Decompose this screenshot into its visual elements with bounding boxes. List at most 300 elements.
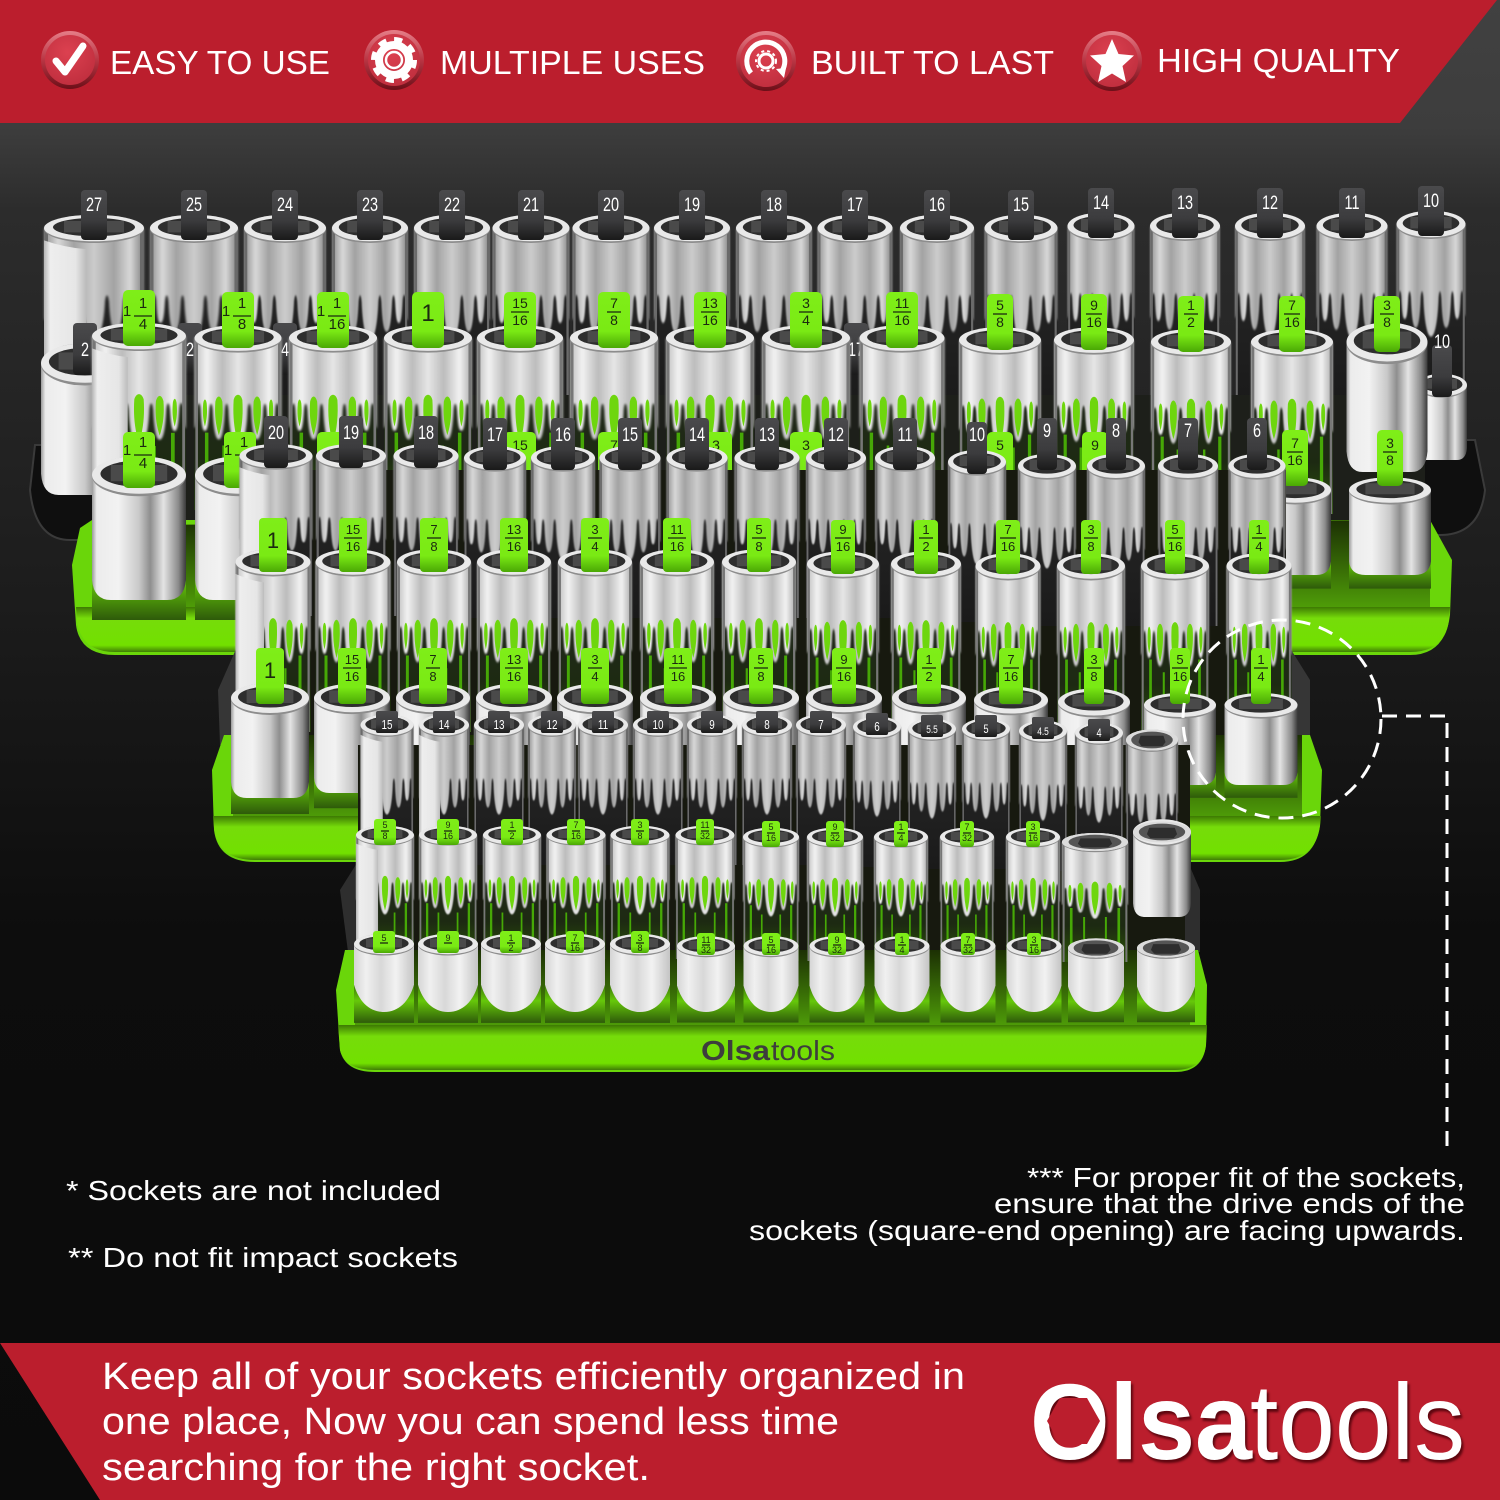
socket 5/16: 16 bbox=[1168, 539, 1182, 554]
socket 1 1/4 front: 4 bbox=[139, 455, 147, 472]
footer message: one place, Now you can spend less time bbox=[102, 1401, 839, 1443]
socket 5 bbox=[962, 715, 1010, 869]
rack: middle black base bbox=[218, 640, 1310, 745]
socket 9 bbox=[1018, 418, 1076, 626]
socket 7/8 front bbox=[396, 648, 470, 808]
logo on tray: Olsa bbox=[701, 1035, 770, 1066]
socket 3/4 front: 4 bbox=[591, 669, 599, 684]
socket 1/4: 1 bbox=[898, 822, 904, 832]
socket 5.5: 5.5 bbox=[926, 724, 938, 736]
socket 1 1/8: 8 bbox=[238, 316, 246, 333]
peg 7/8 front: 7 bbox=[610, 437, 618, 453]
socket 13/16: 13 bbox=[702, 295, 718, 311]
socket 7/16 bbox=[976, 520, 1040, 736]
socket 20: 20 bbox=[268, 422, 284, 444]
socket 1/4: 4 bbox=[1255, 539, 1263, 554]
socket 25 bbox=[150, 190, 238, 404]
socket 14 bbox=[1068, 188, 1134, 402]
peg 15/16 front bbox=[504, 432, 536, 488]
socket 11/16: 11 bbox=[670, 522, 684, 537]
socket 11/32: 11 bbox=[701, 935, 711, 945]
socket 7/16 bbox=[546, 819, 606, 959]
socket 11/32 bbox=[676, 819, 734, 959]
socket 3/8 front bbox=[1349, 430, 1431, 589]
socket row: middle metric bbox=[240, 416, 1286, 626]
socket 15/16 front: 15 bbox=[345, 652, 359, 667]
socket 7/8: 7 bbox=[610, 295, 618, 311]
socket row: front inch bbox=[356, 819, 1191, 962]
socket 18 bbox=[736, 190, 812, 404]
socket 1 1/4: 1 bbox=[123, 303, 131, 320]
socket 1 bbox=[236, 518, 310, 732]
socket 6: 6 bbox=[1253, 420, 1261, 442]
socket 1/4: 4 bbox=[899, 945, 905, 955]
socket 14: 14 bbox=[689, 424, 705, 446]
socket 11/16 front bbox=[640, 648, 716, 808]
socket 1 1/4 bbox=[92, 290, 186, 512]
note: proper fit: ensure that the drive ends of the bbox=[994, 1188, 1465, 1219]
socket 23: 23 bbox=[362, 194, 378, 216]
socket 8 bbox=[1087, 418, 1145, 626]
socket 15: 15 bbox=[1013, 194, 1029, 216]
socket 3/8 front bbox=[1058, 648, 1130, 806]
socket 1 front bbox=[231, 648, 309, 814]
socket 11/16 front: 11 bbox=[671, 652, 685, 667]
socket 1/2: 1 bbox=[922, 522, 930, 537]
peg 9/16 front bbox=[1082, 432, 1108, 488]
socket 7/32 bbox=[940, 821, 994, 961]
socket 9/16: 16 bbox=[443, 831, 453, 841]
socket 3/16: 16 bbox=[1028, 833, 1038, 843]
socket row: middle inch bbox=[236, 518, 1292, 736]
socket 12: 12 bbox=[547, 719, 557, 732]
socket 3/8 bbox=[610, 819, 670, 959]
socket 20 bbox=[572, 190, 650, 404]
socket 12 bbox=[528, 711, 576, 865]
socket 10: 10 bbox=[1423, 190, 1439, 212]
socket 11 bbox=[875, 418, 935, 618]
socket 15/16 front bbox=[314, 648, 390, 808]
socket 1/2 bbox=[483, 819, 541, 959]
socket 3/4: 4 bbox=[802, 312, 810, 328]
socket 13/16: 13 bbox=[507, 522, 521, 537]
socket 7/32: 7 bbox=[964, 822, 970, 832]
socket 1/4 front bbox=[1224, 648, 1298, 798]
socket 15/16: 15 bbox=[512, 295, 528, 311]
socket 5/8: 8 bbox=[382, 831, 388, 841]
socket blank bbox=[1137, 938, 1195, 1022]
socket 1/4 bbox=[874, 933, 930, 1023]
socket 9/16: 16 bbox=[1086, 314, 1102, 330]
socket 1 1/4: 1 bbox=[139, 295, 147, 312]
socket 4.5 bbox=[1019, 717, 1067, 871]
socket short left: 2 bbox=[81, 339, 89, 361]
socket 24: 24 bbox=[277, 194, 293, 216]
socket 1 1/8 front: 1 bbox=[224, 442, 232, 459]
socket 13: 13 bbox=[494, 719, 504, 732]
tray: front green bbox=[336, 950, 1207, 1072]
socket 5/8: 5 bbox=[382, 820, 388, 830]
socket 6 bbox=[853, 713, 901, 867]
socket 7/16: 16 bbox=[1284, 314, 1300, 330]
logo: Olsatools bbox=[1030, 1361, 1465, 1482]
socket 9/16 bbox=[807, 520, 879, 734]
socket 7/16 bbox=[545, 931, 605, 1023]
socket 22 bbox=[414, 190, 490, 404]
peg 15/16 front: 15 bbox=[512, 437, 528, 453]
socket 3/16: 3 bbox=[1031, 935, 1037, 945]
socket 9/32 bbox=[810, 933, 864, 1023]
socket 9/16 bbox=[419, 819, 477, 959]
socket 12 bbox=[806, 418, 866, 618]
socket 1/4 bbox=[874, 821, 928, 961]
peg 5/8 front bbox=[987, 432, 1013, 488]
socket 1 1/16: 1 bbox=[333, 295, 341, 312]
socket 3/8 front: 3 bbox=[1386, 435, 1394, 451]
socket 3/4 front: 3 bbox=[591, 652, 599, 667]
socket 9/32 bbox=[807, 821, 863, 961]
socket 11/16 bbox=[860, 292, 944, 510]
socket 11/32: 11 bbox=[700, 820, 710, 830]
socket 1/2: 1 bbox=[509, 820, 515, 830]
socket 8 bbox=[742, 711, 792, 865]
socket 5/8: 5 bbox=[996, 297, 1004, 313]
logo: Olsatools: Olsa bbox=[1030, 1361, 1253, 1482]
label: easy to use: EASY TO USE bbox=[110, 44, 330, 81]
socket 13/16 front: 13 bbox=[507, 652, 521, 667]
icon: check badge bbox=[41, 31, 99, 89]
socket 3/8 bbox=[1346, 296, 1428, 472]
label: built to last: BUILT TO LAST bbox=[811, 44, 1054, 81]
socket 3/8: 8 bbox=[637, 831, 643, 841]
socket 15/16: 15 bbox=[346, 522, 360, 537]
peg 24 bbox=[273, 323, 297, 375]
socket short 10 bbox=[1417, 331, 1467, 460]
socket 13/16 bbox=[666, 292, 754, 510]
socket 14: 14 bbox=[439, 719, 450, 732]
socket 3/16: 16 bbox=[1029, 945, 1039, 955]
socket 1/2 bbox=[891, 520, 961, 734]
socket 1/2 front: 2 bbox=[925, 669, 933, 684]
socket 5/16 front: 5 bbox=[1176, 652, 1184, 667]
icon: star badge bbox=[1082, 31, 1142, 91]
socket 7: 7 bbox=[818, 719, 824, 732]
socket 16: 16 bbox=[555, 424, 571, 446]
socket 17: 17 bbox=[847, 194, 863, 216]
footer message bbox=[102, 1356, 965, 1489]
socket 23 bbox=[332, 190, 408, 404]
socket 7/16: 16 bbox=[1001, 539, 1015, 554]
socket 13 bbox=[1150, 188, 1220, 402]
socket 5/8: 5 bbox=[381, 933, 387, 943]
socket 5/16: 5 bbox=[768, 935, 774, 945]
note: proper fit: sockets (square-end opening) are facing upwards. bbox=[749, 1215, 1465, 1246]
socket 7/16 front: 7 bbox=[1007, 652, 1015, 667]
socket 1 1/8: 1 bbox=[222, 303, 230, 320]
socket 1/2 front: 1 bbox=[925, 652, 933, 667]
socket 11/32 bbox=[677, 933, 735, 1023]
note: proper fit bbox=[749, 1162, 1465, 1246]
socket 1/2 bbox=[481, 931, 541, 1023]
socket 1: 1 bbox=[421, 300, 435, 327]
front dark cavity bbox=[358, 745, 1190, 960]
socket 1 1/4 front: 1 bbox=[123, 442, 131, 459]
socket 9/16: 9 bbox=[445, 820, 451, 830]
socket 9/16: 9 bbox=[445, 933, 451, 943]
footer message: Keep all of your sockets efficiently organized in bbox=[102, 1356, 965, 1398]
socket 1 front: 1 bbox=[264, 658, 276, 683]
back dark cavity bbox=[95, 395, 1425, 565]
socket row: back inch bbox=[92, 290, 1428, 514]
socket 11/16: 16 bbox=[670, 539, 684, 554]
socket 7/32: 32 bbox=[962, 833, 972, 843]
socket 16 bbox=[531, 418, 595, 618]
socket 18 bbox=[394, 416, 458, 616]
socket 7/16: 16 bbox=[570, 943, 580, 953]
socket 8: 8 bbox=[1112, 420, 1120, 442]
tray: back green bbox=[72, 520, 1452, 655]
socket 3/8: 3 bbox=[1383, 297, 1391, 313]
footer message: searching for the right socket. bbox=[102, 1447, 650, 1489]
socket 3/4 bbox=[558, 518, 632, 732]
socket 1/4 front: 4 bbox=[1257, 669, 1265, 684]
socket 9/16: 9 bbox=[1090, 297, 1098, 313]
socket 12 bbox=[1235, 188, 1305, 402]
logo hexagon hole bbox=[1047, 1398, 1100, 1444]
socket 1/4 bbox=[1226, 520, 1292, 736]
socket short left bbox=[41, 323, 129, 495]
socket 20 bbox=[240, 416, 312, 616]
socket 11/16 front: 16 bbox=[671, 669, 685, 684]
socket 7/16: 7 bbox=[1288, 297, 1296, 313]
peg 25 bbox=[178, 323, 202, 375]
note: sockets not included: * Sockets are not included bbox=[66, 1175, 441, 1206]
socket 5/16: 16 bbox=[766, 833, 776, 843]
socket 15/16 bbox=[477, 292, 563, 510]
socket 5: 5 bbox=[983, 723, 989, 736]
socket 5/8: 8 bbox=[996, 314, 1004, 330]
socket 14: 14 bbox=[1093, 192, 1109, 214]
socket 3/4: 3 bbox=[802, 295, 810, 311]
socket 1/2: 2 bbox=[508, 943, 514, 953]
socket 22: 22 bbox=[444, 194, 460, 216]
socket 5/8 bbox=[354, 931, 414, 1023]
footer banner bbox=[0, 1343, 1500, 1500]
socket 1 1/8 front bbox=[195, 432, 285, 620]
socket 1: 1 bbox=[267, 528, 279, 553]
socket 1/2: 1 bbox=[1187, 297, 1195, 313]
socket 5/8 front: 5 bbox=[757, 652, 765, 667]
socket 1 1/4: 4 bbox=[139, 316, 147, 333]
socket 10 bbox=[633, 711, 683, 865]
socket 1/4 front: 1 bbox=[1257, 652, 1265, 667]
socket 15 bbox=[360, 711, 414, 865]
socket 1/2: 2 bbox=[509, 831, 515, 841]
socket 1/4: 1 bbox=[1255, 522, 1263, 537]
socket 13: 13 bbox=[759, 424, 775, 446]
label: high quality: HIGH QUALITY bbox=[1157, 42, 1400, 79]
socket 1 1/8 front: 1 bbox=[240, 434, 248, 451]
socket 15 bbox=[984, 190, 1058, 404]
socket 27 bbox=[44, 190, 144, 404]
socket 19: 19 bbox=[684, 194, 700, 216]
socket 7 bbox=[796, 711, 846, 865]
socket 11/16 bbox=[640, 518, 714, 732]
socket 9/16 front: 9 bbox=[840, 652, 848, 667]
socket 7/8: 7 bbox=[430, 522, 438, 537]
socket 1 1/16: 1 bbox=[317, 303, 325, 320]
socket 21: 21 bbox=[523, 194, 539, 216]
peg 13/16 front: 3 bbox=[712, 437, 720, 453]
socket 5/8 bbox=[722, 518, 796, 732]
socket 11: 11 bbox=[898, 424, 912, 446]
socket 1/4: 4 bbox=[898, 833, 904, 843]
socket 19 bbox=[654, 190, 730, 404]
socket 9/16: 9 bbox=[839, 522, 847, 537]
socket 12: 12 bbox=[828, 424, 844, 446]
socket 18: 18 bbox=[766, 194, 782, 216]
socket 10 bbox=[1396, 186, 1466, 400]
socket 3/4: 3 bbox=[591, 522, 599, 537]
socket 11: 11 bbox=[1345, 192, 1359, 214]
socket 7/16: 7 bbox=[1004, 522, 1012, 537]
peg 7/8 front bbox=[598, 432, 630, 488]
socket 3/4 front bbox=[557, 648, 633, 808]
socket 3/8 front: 8 bbox=[1386, 452, 1394, 468]
logo: Olsatools: tools bbox=[1250, 1361, 1465, 1482]
socket 9: 9 bbox=[709, 719, 715, 732]
socket 7/16 front: 16 bbox=[1004, 669, 1018, 684]
socket 13 bbox=[734, 418, 800, 618]
socket 1/2 front bbox=[892, 648, 966, 808]
socket 17: 17 bbox=[487, 424, 503, 446]
socket 9/16 bbox=[418, 931, 478, 1023]
socket 9 bbox=[687, 711, 737, 865]
socket 11/32: 32 bbox=[701, 945, 711, 955]
socket 5/16: 5 bbox=[1171, 522, 1179, 537]
socket 3/8: 3 bbox=[637, 820, 643, 830]
socket 10: 10 bbox=[969, 424, 985, 446]
peg 5/8 front: 5 bbox=[996, 437, 1004, 453]
socket 1 1/4 front bbox=[92, 432, 186, 620]
socket 9/16: 16 bbox=[836, 539, 850, 554]
socket 18: 18 bbox=[418, 422, 434, 444]
socket 1/4: 1 bbox=[899, 935, 905, 945]
socket 4.5: 4.5 bbox=[1037, 726, 1049, 738]
label: multiple uses: MULTIPLE USES bbox=[440, 44, 705, 81]
socket blank bbox=[1062, 833, 1128, 962]
socket 3/8 front: 3 bbox=[1090, 652, 1098, 667]
socket 11: 11 bbox=[598, 719, 608, 732]
socket 7/8 front: 7 bbox=[429, 652, 437, 667]
socket 3/16: 3 bbox=[1030, 822, 1036, 832]
socket 7/16 front bbox=[974, 648, 1048, 804]
socket 11/16: 16 bbox=[894, 312, 910, 328]
socket 3/16 bbox=[1006, 821, 1060, 961]
socket 11 bbox=[578, 711, 628, 865]
socket 13/16 front bbox=[476, 648, 552, 808]
peg 3/4 front bbox=[790, 432, 822, 488]
socket 25: 25 bbox=[186, 194, 202, 216]
socket 6 bbox=[1228, 418, 1286, 626]
socket 15/16: 16 bbox=[346, 539, 360, 554]
socket 5/16 front bbox=[1144, 648, 1216, 798]
note: impact sockets: ** Do not fit impact sockets bbox=[68, 1242, 458, 1273]
socket 7: 7 bbox=[1184, 420, 1192, 442]
socket 5/8 bbox=[959, 294, 1041, 512]
socket 7/8 bbox=[397, 518, 471, 732]
socket 20: 20 bbox=[603, 194, 619, 216]
socket 7/32: 7 bbox=[965, 935, 971, 945]
socket 3/8: 3 bbox=[637, 933, 643, 943]
socket 9/32: 32 bbox=[830, 833, 840, 843]
socket 5/16 bbox=[1141, 520, 1209, 736]
socket row: back metric bbox=[44, 186, 1466, 404]
socket 7/16 bbox=[1251, 296, 1333, 514]
socket 7/16: 7 bbox=[573, 820, 579, 830]
socket 15: 15 bbox=[622, 424, 638, 446]
socket blank bbox=[1068, 938, 1124, 1022]
socket 1/2: 2 bbox=[922, 539, 930, 554]
socket 7/16 front bbox=[1259, 430, 1331, 589]
socket row: front metric bbox=[360, 711, 1178, 880]
socket 15/16 bbox=[316, 518, 390, 732]
socket 5/8 bbox=[356, 819, 414, 959]
socket 13/16 bbox=[477, 518, 551, 732]
socket 7/32 bbox=[940, 933, 996, 1023]
logo on tray: tools bbox=[771, 1035, 835, 1066]
socket 3/16 bbox=[1006, 933, 1062, 1023]
rack: front black base bbox=[340, 855, 1200, 952]
socket 11 bbox=[1316, 188, 1388, 402]
socket 13 bbox=[474, 711, 524, 865]
peg 3/4 front: 3 bbox=[802, 437, 810, 453]
callout: dashed circle and leader bbox=[1183, 620, 1447, 1150]
socket 7/16: 7 bbox=[572, 933, 578, 943]
socket short 10: 10 bbox=[1434, 331, 1450, 353]
socket 13/16 front: 16 bbox=[507, 669, 521, 684]
socket 15/16 front: 16 bbox=[345, 669, 359, 684]
socket 19 bbox=[316, 416, 386, 616]
socket row: back inch front bbox=[92, 430, 1431, 620]
socket 11/16: 11 bbox=[895, 295, 909, 311]
peg 24: 4 bbox=[281, 339, 289, 361]
socket 1 1/8 front: 8 bbox=[240, 455, 248, 472]
socket 5/8: 5 bbox=[755, 522, 763, 537]
socket 1 1/16 bbox=[289, 292, 377, 510]
socket 3/8: 3 bbox=[1087, 522, 1095, 537]
socket blank bbox=[1126, 730, 1178, 880]
peg 17: 17 bbox=[848, 339, 864, 361]
socket 7 bbox=[1158, 418, 1218, 626]
socket 7/8: 8 bbox=[610, 312, 618, 328]
socket 5/16 front: 16 bbox=[1173, 669, 1187, 684]
socket row: middle inch front bbox=[231, 648, 1298, 814]
socket 11/32: 32 bbox=[700, 831, 710, 841]
socket 3/8 bbox=[1057, 520, 1125, 736]
socket 17 bbox=[818, 190, 892, 404]
socket 19: 19 bbox=[343, 422, 359, 444]
socket 5/16 bbox=[743, 821, 799, 961]
socket 3/8: 8 bbox=[637, 943, 643, 953]
socket 9/16 bbox=[1054, 294, 1134, 512]
icon: gear badge bbox=[364, 30, 424, 90]
socket row: front inch short bbox=[354, 931, 1195, 1023]
socket 3/8: 8 bbox=[1383, 314, 1391, 330]
note: proper fit: *** For proper fit of the sockets, bbox=[1027, 1162, 1465, 1193]
socket 5/8 front: 8 bbox=[757, 669, 765, 684]
socket 9: 9 bbox=[1043, 420, 1051, 442]
